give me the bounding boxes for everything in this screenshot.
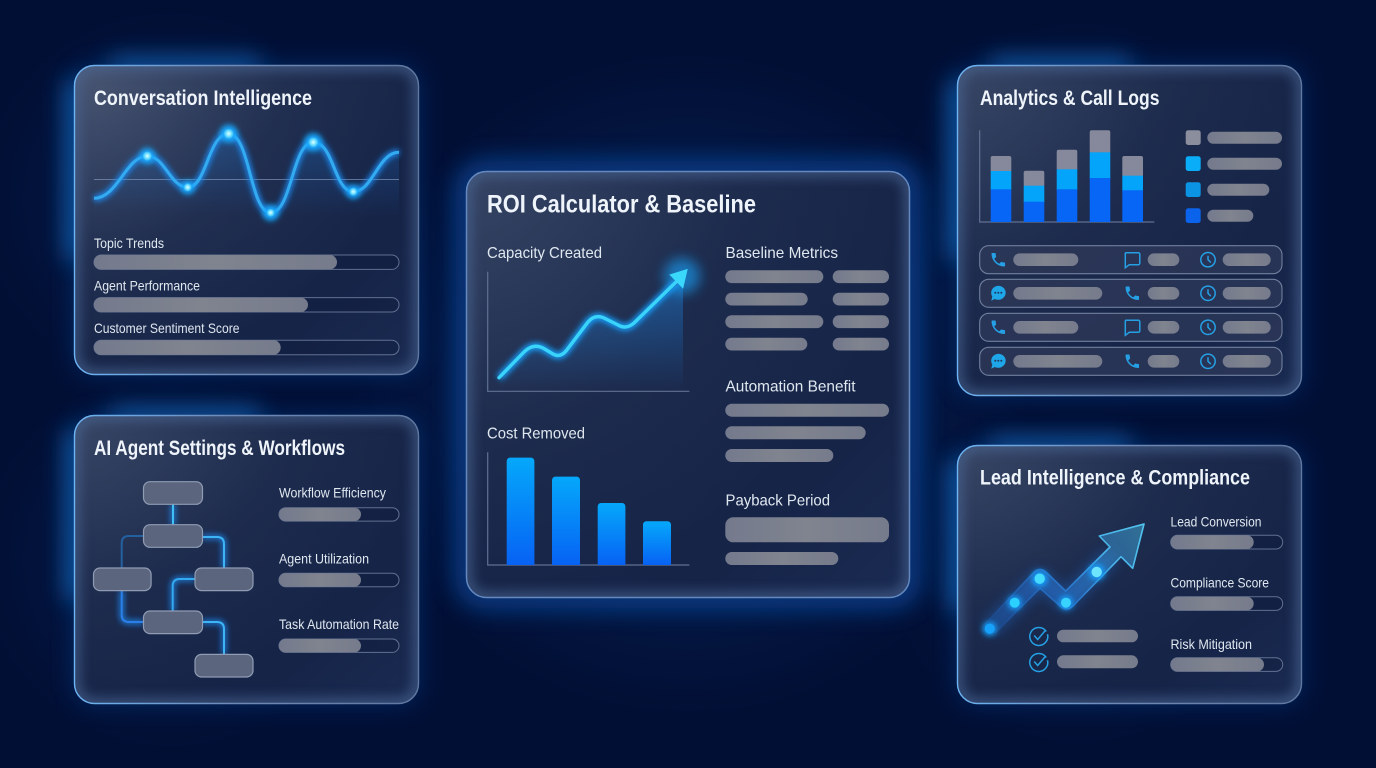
label: automation benefit: Automation Benefit bbox=[726, 379, 856, 396]
call log row 2 bbox=[980, 279, 1282, 307]
metric: task automation rate bbox=[279, 616, 399, 652]
metric: risk mitigation: Risk Mitigation bbox=[1170, 636, 1252, 652]
metric: workflow efficiency: Workflow Efficiency bbox=[279, 485, 386, 501]
metric: compliance score: Compliance Score bbox=[1170, 575, 1269, 591]
metric: risk mitigation bbox=[1170, 636, 1283, 671]
checklist bbox=[1030, 627, 1138, 671]
placeholder rows: baseline metrics bbox=[725, 270, 889, 350]
call log row 1 bbox=[980, 246, 1282, 274]
placeholder rows: automation benefit bbox=[725, 404, 889, 462]
metric: compliance score bbox=[1170, 575, 1283, 610]
call log row 4 bbox=[980, 347, 1282, 375]
heading: Lead Intelligence & Compliance bbox=[980, 466, 1250, 489]
label: payback period: Payback Period bbox=[726, 492, 830, 509]
metric: customer sentiment score bbox=[94, 320, 399, 355]
call log row 3 bbox=[980, 313, 1282, 341]
label: capacity created: Capacity Created bbox=[487, 245, 602, 262]
label: cost removed: Cost Removed bbox=[487, 425, 585, 442]
heading: AI Agent Settings & Workflows bbox=[94, 437, 345, 460]
heading: ROI Calculator & Baseline bbox=[487, 190, 756, 218]
metric: agent utilization bbox=[279, 550, 399, 587]
line chart: conversation wave bbox=[94, 125, 399, 221]
metric: lead conversion bbox=[1170, 514, 1283, 549]
placeholder rows: payback period bbox=[725, 517, 889, 565]
heading: Analytics & Call Logs bbox=[980, 87, 1160, 110]
metric: lead conversion: Lead Conversion bbox=[1170, 514, 1262, 530]
heading: Conversation Intelligence bbox=[94, 87, 312, 110]
metric: agent performance bbox=[94, 278, 399, 312]
panel: conversation intelligence bbox=[74, 65, 419, 375]
panel: ai agent settings and workflows bbox=[74, 415, 419, 704]
metric: customer sentiment score: Customer Sentiment Score bbox=[94, 320, 240, 336]
stacked bar chart bbox=[980, 130, 1154, 222]
label: baseline metrics: Baseline Metrics bbox=[726, 245, 838, 262]
metric: workflow efficiency bbox=[279, 485, 399, 521]
workflow diagram bbox=[94, 482, 253, 677]
metric: agent performance: Agent Performance bbox=[94, 278, 200, 294]
metric: agent utilization: Agent Utilization bbox=[279, 550, 369, 566]
panel: analytics and call logs bbox=[957, 65, 1302, 396]
metric: task automation rate: Task Automation Rate bbox=[279, 616, 399, 632]
panel: lead intelligence and compliance bbox=[957, 445, 1302, 704]
metric: topic trends bbox=[94, 235, 399, 269]
bar chart: cost removed bbox=[488, 452, 689, 565]
panel: roi calculator and baseline bbox=[466, 171, 910, 598]
legend bbox=[1186, 130, 1282, 223]
area chart: capacity created bbox=[488, 258, 700, 391]
growth arrow with nodes bbox=[983, 524, 1144, 636]
metric: topic trends: Topic Trends bbox=[94, 235, 164, 251]
